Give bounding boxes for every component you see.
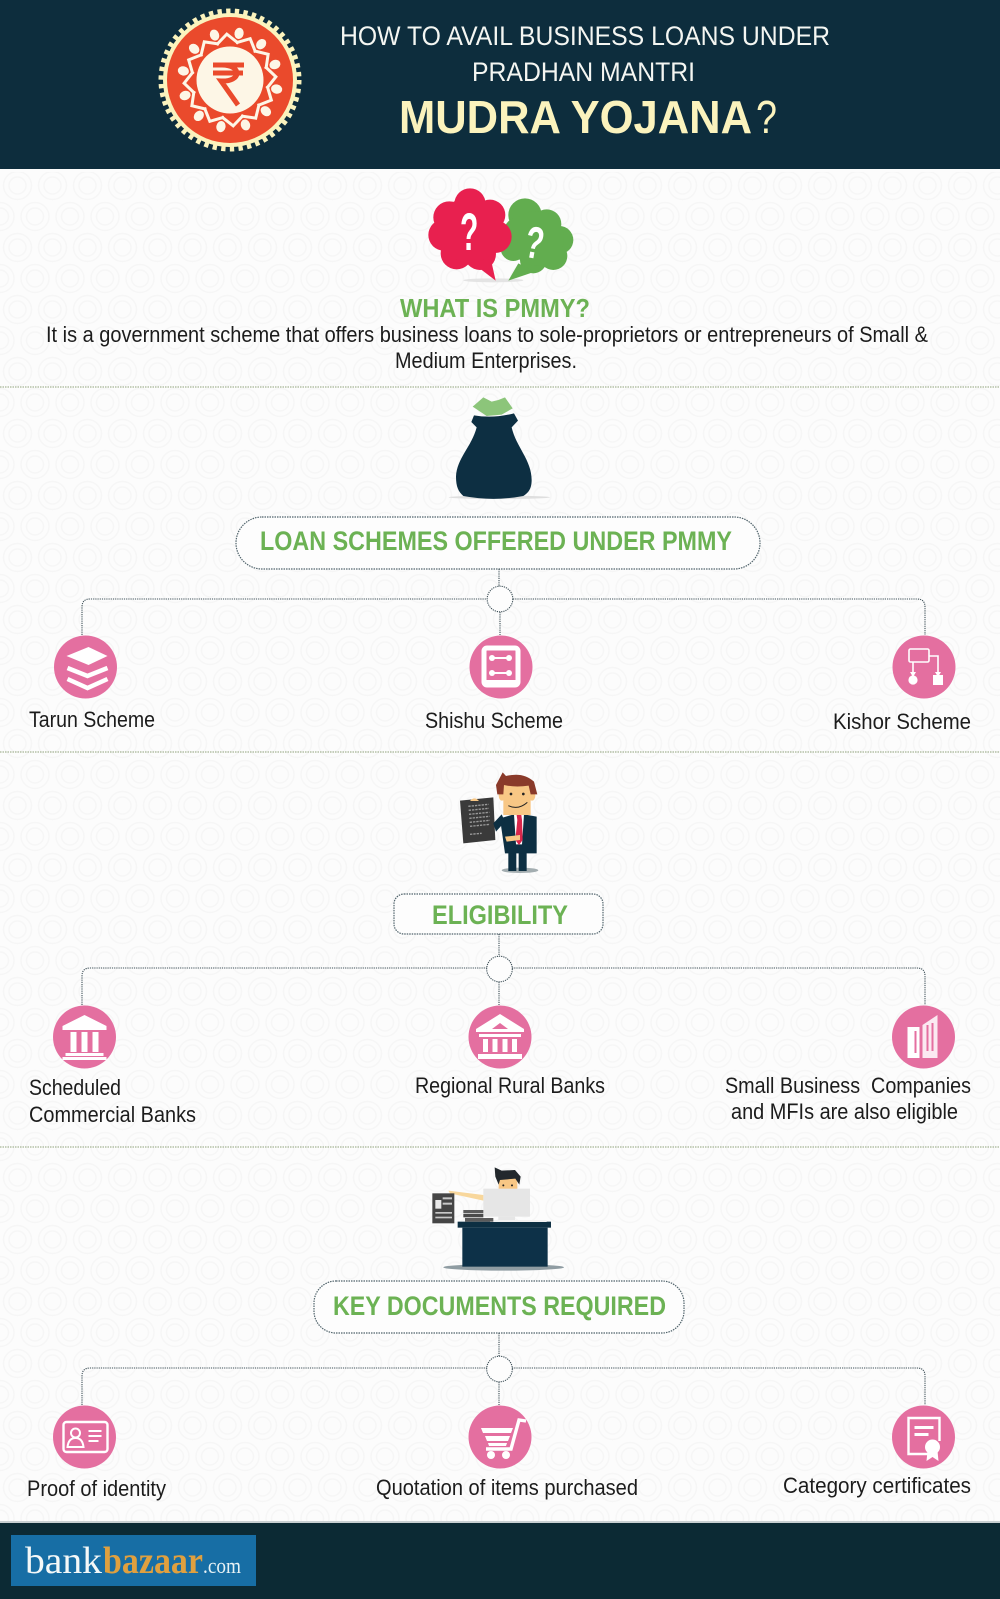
label: regional rural banks: Regional Rural Banks bbox=[415, 1073, 605, 1098]
icon: layers bbox=[54, 636, 117, 698]
label: small business companies bbox=[725, 1073, 971, 1124]
icon: flowchart bbox=[892, 636, 956, 698]
header banner bbox=[0, 0, 1000, 169]
title: ? bbox=[756, 91, 777, 143]
icon: rural bank bbox=[468, 1006, 532, 1068]
icon: rupee seal bbox=[161, 11, 299, 149]
logo: bankbazaar bbox=[11, 1535, 256, 1586]
title: MUDRA YOJANA bbox=[399, 91, 752, 143]
heading: eligibility: ELIGIBILITY bbox=[432, 900, 568, 930]
label: scheduled commercial banks: Commercial Banks bbox=[29, 1102, 196, 1127]
label: scheduled commercial banks bbox=[29, 1075, 196, 1127]
icon: businessman holding document bbox=[460, 772, 538, 873]
label: tarun scheme: Tarun Scheme bbox=[29, 707, 155, 732]
heading: eligibility bbox=[394, 894, 603, 934]
label: shishu scheme: Shishu Scheme bbox=[425, 708, 563, 733]
logo: bankbazaar: bazaar bbox=[103, 1540, 203, 1582]
connector tree bbox=[82, 1333, 925, 1405]
panel: key documents bbox=[27, 1281, 971, 1501]
icon: question speech bubbles bbox=[428, 188, 573, 282]
title bbox=[340, 21, 830, 143]
heading: loan schemes bbox=[236, 517, 760, 569]
connector tree bbox=[82, 934, 925, 1005]
label: proof of identity: Proof of identity bbox=[27, 1476, 166, 1501]
label: small business companies: and MFIs are also eligible bbox=[731, 1099, 958, 1124]
panel: eligibility bbox=[29, 894, 971, 1127]
heading: key documents: KEY DOCUMENTS REQUIRED bbox=[333, 1291, 666, 1321]
footer bar bbox=[0, 1521, 1000, 1599]
icon: shopping cart bbox=[468, 1406, 532, 1468]
icon: question speech bubbles: ? bbox=[460, 203, 478, 262]
text: pmmy description: It is a government scheme that offers business loans to sole-proprietors or entrepreneurs of Small & bbox=[46, 322, 928, 347]
connector tree bbox=[82, 569, 925, 635]
text: pmmy description: Medium Enterprises. bbox=[395, 348, 577, 373]
label: scheduled commercial banks: Scheduled bbox=[29, 1075, 121, 1100]
icon: bank with columns bbox=[53, 1006, 116, 1068]
title: PRADHAN MANTRI bbox=[472, 57, 695, 87]
logo: bankbazaar: .com bbox=[203, 1553, 241, 1578]
heading: what is pmmy: WHAT IS PMMY? bbox=[400, 293, 590, 323]
text: pmmy description bbox=[46, 322, 928, 373]
label: kishor scheme: Kishor Scheme bbox=[833, 709, 971, 734]
logo: bankbazaar: bank bbox=[25, 1540, 102, 1582]
title: HOW TO AVAIL BUSINESS LOANS UNDER bbox=[340, 21, 830, 51]
icon: question speech bubbles: ? bbox=[521, 216, 548, 269]
panel: loan schemes bbox=[29, 517, 971, 734]
icon: office buildings bbox=[892, 1006, 955, 1068]
heading: key documents bbox=[314, 1281, 684, 1333]
icon: money bag bbox=[449, 397, 550, 499]
icon: clerk at desk bbox=[432, 1167, 564, 1271]
label: category certificates: Category certificates bbox=[783, 1473, 971, 1498]
icon: id card bbox=[53, 1406, 116, 1468]
icon: certificate bbox=[892, 1406, 955, 1468]
label: quotation of items purchased: Quotation of items purchased bbox=[376, 1475, 638, 1500]
icon: circuit board bbox=[470, 636, 532, 698]
heading: loan schemes: LOAN SCHEMES OFFERED UNDER PMMY bbox=[260, 526, 732, 556]
label: small business companies: Small Business Companies bbox=[725, 1073, 971, 1098]
